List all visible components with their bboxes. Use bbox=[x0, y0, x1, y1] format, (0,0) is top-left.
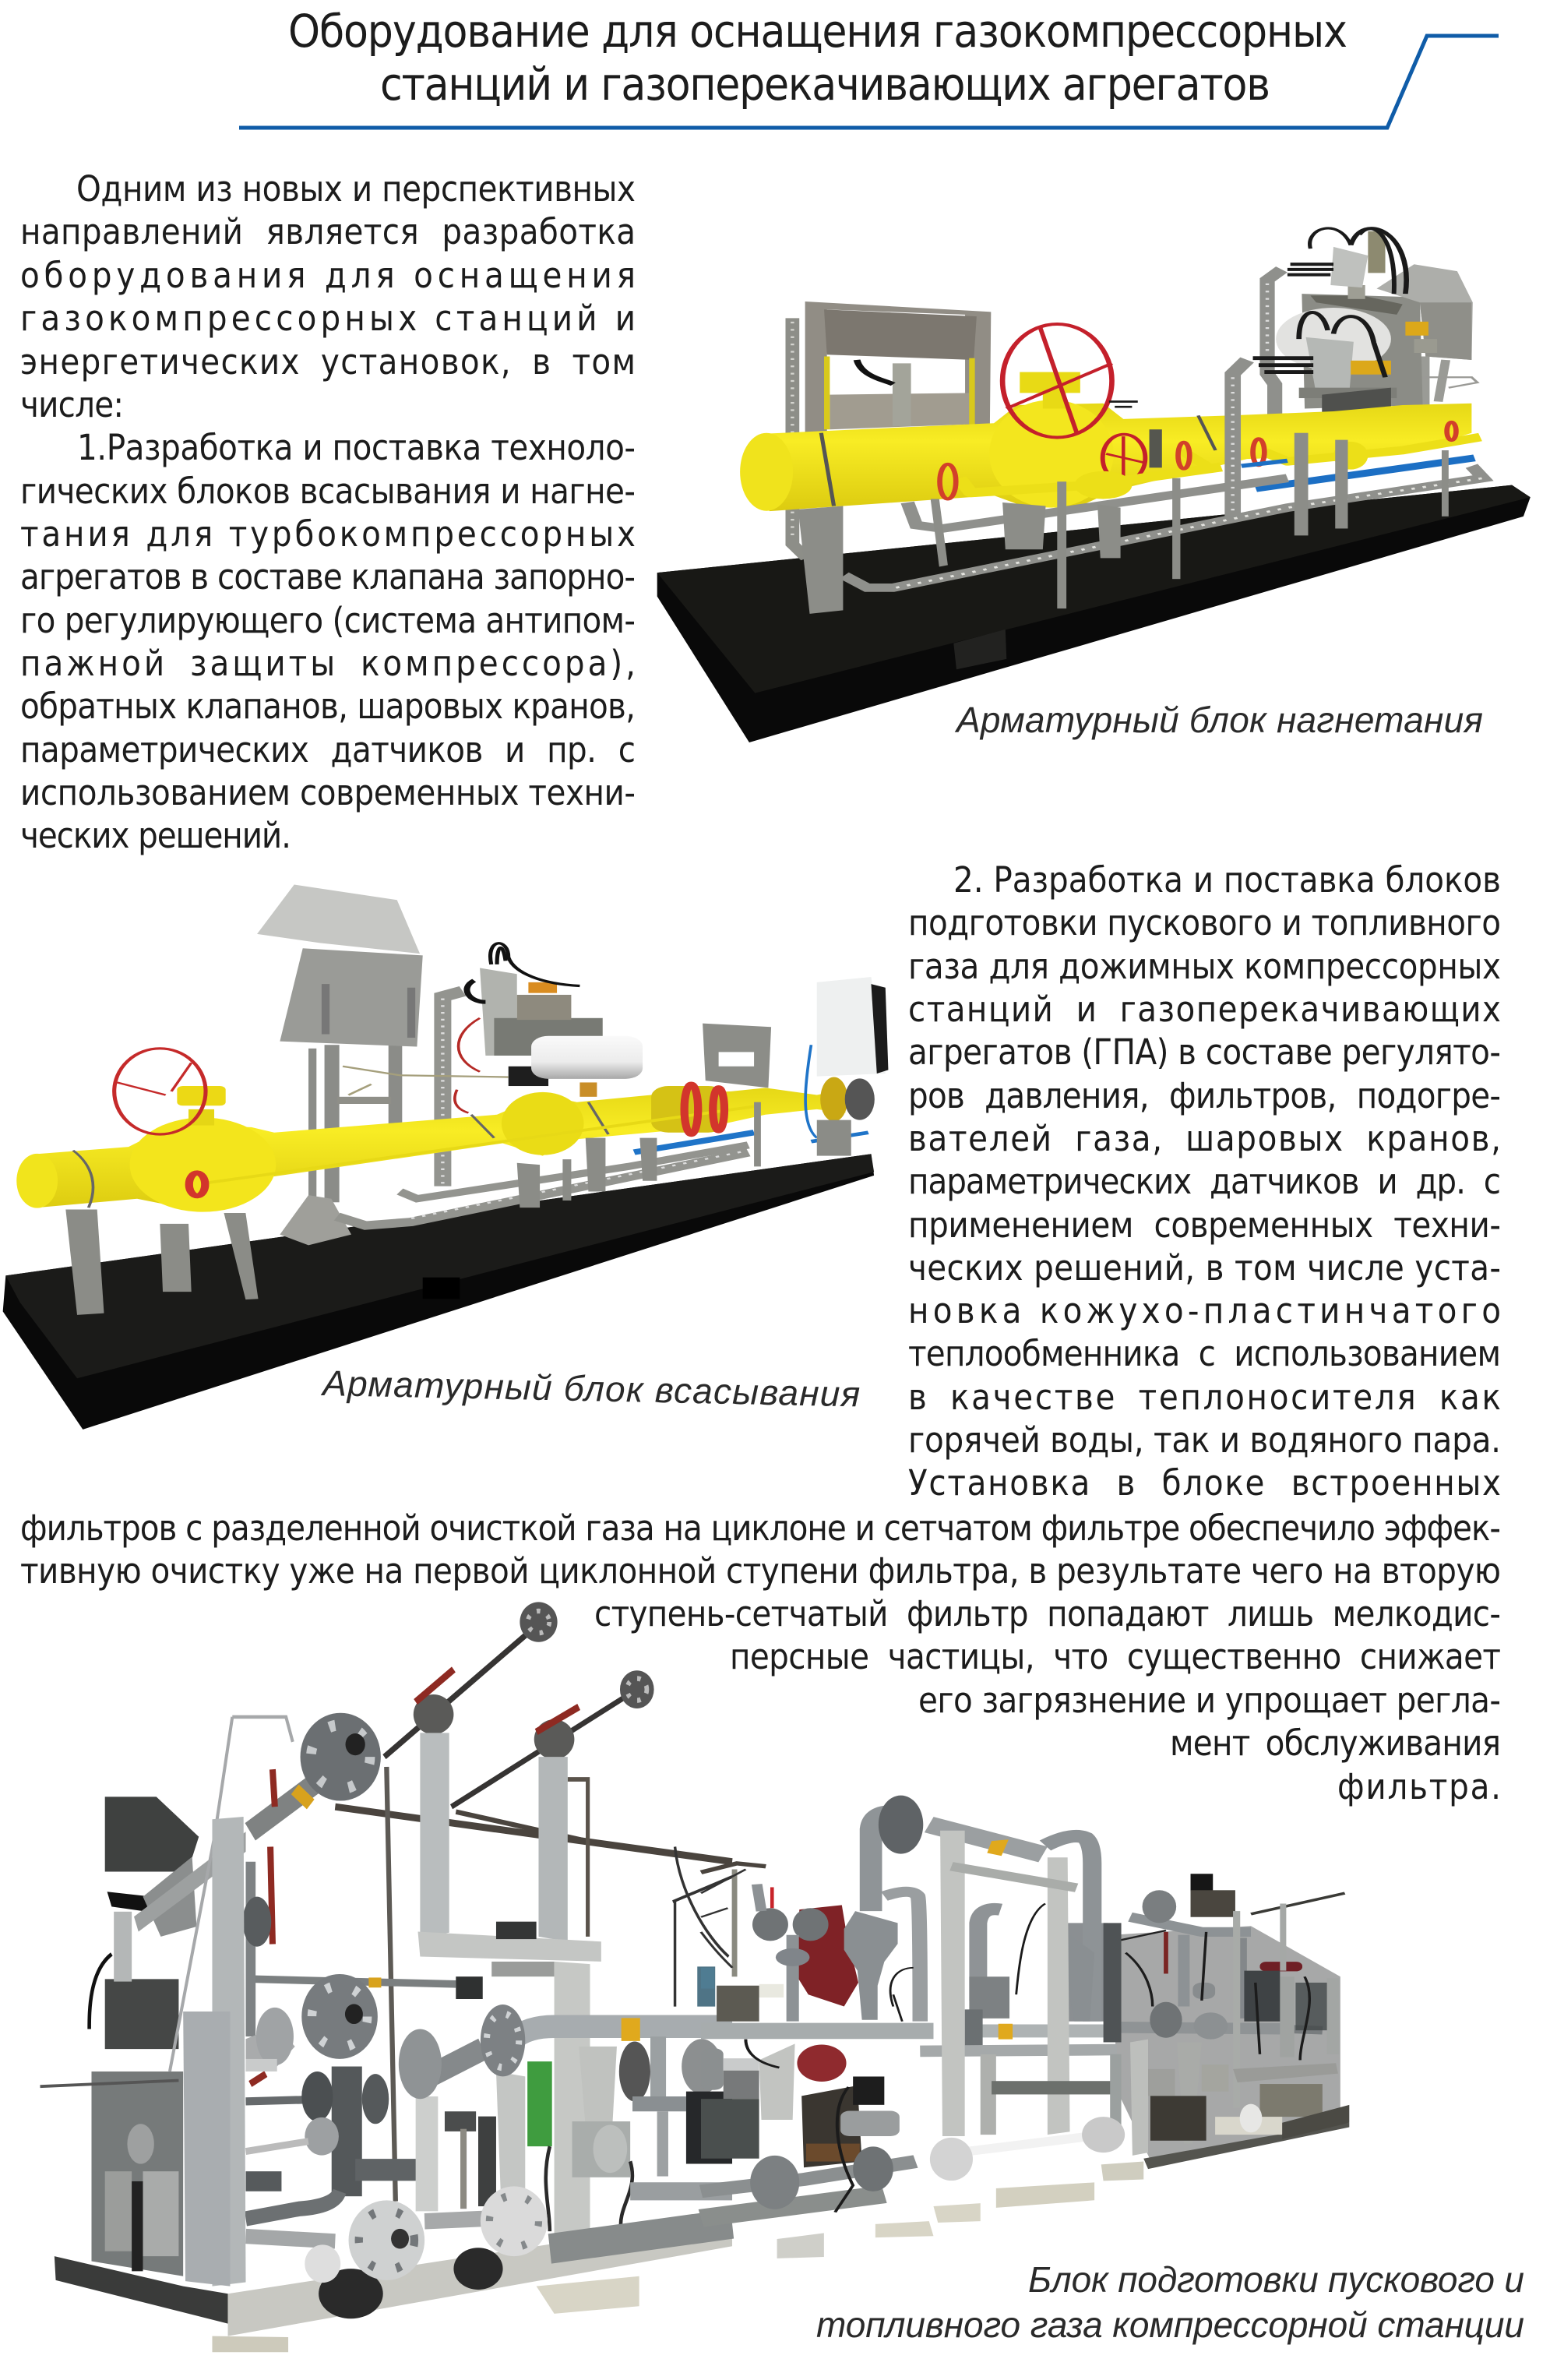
text block: item 2 bbox=[20, 859, 1501, 1807]
skid beams and timber bbox=[701, 2123, 1349, 2258]
actuator cables bbox=[467, 943, 579, 1002]
dark rods and valves bbox=[40, 1602, 732, 2202]
blue pipes bbox=[1242, 458, 1474, 488]
platform bbox=[657, 485, 1531, 742]
text block: item 2: вателей газа, шаровых кранов, bbox=[908, 1118, 1501, 1159]
far section of the unit bbox=[1104, 1874, 1349, 2156]
text block: item 2: ческих решений, в том числе уста- bbox=[908, 1247, 1501, 1289]
text block: introduction and item 1: го регулирующего (система антипом- bbox=[20, 600, 636, 641]
platform bbox=[3, 1154, 874, 1430]
caption: gas preparation block: топливного газа компрессорной станции bbox=[816, 2304, 1524, 2345]
text block: introduction and item 1: обратных клапанов, шаровых кранов, bbox=[20, 686, 636, 727]
text block: introduction and item 1: направлений является разработка bbox=[20, 211, 636, 252]
lower pipe runs bbox=[701, 1904, 1125, 2213]
hand wheels bbox=[1002, 324, 1145, 481]
rear tall stands bbox=[280, 1045, 402, 1245]
text block: item 2: станций и газоперекачивающих bbox=[908, 989, 1501, 1030]
text block: item 2: новка кожухо-пластинчатого bbox=[908, 1290, 1501, 1331]
small yellow line bbox=[209, 1105, 759, 1183]
supports bbox=[65, 1102, 851, 1315]
text block: item 2: применением современных техни- bbox=[908, 1204, 1501, 1246]
supports bbox=[798, 429, 1449, 614]
text block: introduction and item 1: агрегатов в составе клапана запорно- bbox=[20, 556, 636, 598]
red flanges bbox=[940, 422, 1456, 499]
red handles bbox=[250, 1670, 579, 2084]
skid base bbox=[55, 2216, 732, 2352]
text block: introduction and item 1: пажной защиты компрессора), bbox=[20, 643, 636, 684]
far section backdrop bbox=[1112, 1926, 1340, 2164]
text block: introduction and item 1 bbox=[20, 168, 636, 856]
cable tray risers bbox=[400, 991, 749, 1199]
light frame columns bbox=[183, 1733, 601, 2287]
text block: item 2: теплообменника с использованием bbox=[908, 1333, 1501, 1374]
text block: item 2: Установка в блоке встроенных bbox=[908, 1462, 1501, 1504]
rear frame bbox=[792, 301, 991, 558]
silver impulse line bbox=[343, 1067, 509, 1095]
left part of the unit bbox=[40, 1602, 732, 2352]
photo: discharge valve block bbox=[657, 228, 1531, 742]
actuators and instrument boxes bbox=[1276, 231, 1473, 440]
text block: item 2: персные частицы, что существенно снижает bbox=[730, 1636, 1501, 1677]
text block: introduction and item 1: газокомпрессорных станций и bbox=[20, 298, 636, 339]
light frame posts bbox=[759, 1831, 1122, 2136]
title underline bracket bbox=[239, 36, 1499, 128]
weather shelter bbox=[257, 885, 423, 1047]
text block: introduction and item 1: гических блоков всасывания и нагне- bbox=[20, 471, 636, 512]
text block: item 2: газа для дожимных компрессорных bbox=[908, 946, 1501, 987]
rear elbows bbox=[701, 1863, 1108, 2022]
rear tower tray bbox=[1267, 270, 1478, 433]
lower cable tray bbox=[337, 1151, 749, 1225]
left cabinet and actuators bbox=[91, 1796, 199, 2276]
text block: item 2: фильтров с разделенной очисткой газа на циклоне и сетчатом фильтре обеспечило эффек- bbox=[20, 1507, 1501, 1549]
text block: introduction and item 1: энергетических установок, в том bbox=[20, 341, 636, 383]
caption: discharge block: Арматурный блок нагнетания bbox=[954, 700, 1483, 740]
text block: introduction and item 1: параметрических датчиков и пр. с bbox=[20, 729, 636, 770]
text block: introduction and item 1: оборудования для оснащения bbox=[20, 255, 636, 296]
hand wheel bbox=[114, 1049, 206, 1134]
text block: introduction and item 1: числе: bbox=[20, 384, 124, 425]
mid pipework rear bbox=[243, 1862, 456, 2241]
main riser with cone bbox=[844, 1796, 1094, 2022]
blue pipes bbox=[634, 1045, 868, 1152]
diagonal beam and top flange pipe bbox=[134, 1713, 381, 2071]
title: станций и газоперекачивающих агрегатов bbox=[380, 58, 1270, 111]
right part of the unit bbox=[701, 1796, 1349, 2258]
main grey pipe and flanges bbox=[399, 1922, 732, 2231]
caption: gas preparation block: Блок подготовки пускового и bbox=[1028, 2259, 1524, 2300]
photo: start and fuel gas preparation block bbox=[40, 1602, 1349, 2352]
text block: introduction and item 1: ческих решений. bbox=[20, 815, 291, 856]
text block: item 2: его загрязнение и упрощает регла- bbox=[918, 1680, 1501, 1721]
text block: item 2: ров давления, фильтров, подогре- bbox=[908, 1075, 1501, 1116]
caption: gas preparation block bbox=[816, 2259, 1524, 2345]
caption: suction block: Арматурный блок всасывания bbox=[320, 1363, 861, 1414]
tower backdrop bbox=[1302, 294, 1423, 408]
right frame bbox=[703, 977, 888, 1088]
red valve bbox=[752, 1885, 858, 2082]
cable trays bbox=[844, 360, 1483, 587]
text block: item 2: в качестве теплоносителя как bbox=[908, 1377, 1501, 1418]
control cables bbox=[1109, 228, 1407, 407]
title: Оборудование для оснащения газокомпрессорных bbox=[288, 5, 1347, 58]
lower pale flanges bbox=[305, 2186, 732, 2283]
text block: item 2: подготовки пускового и топливного bbox=[908, 902, 1501, 943]
text block: item 2: мент обслуживания bbox=[1170, 1722, 1501, 1764]
text block: introduction and item 1: 1.Разработка и поставка техноло- bbox=[77, 427, 636, 468]
actuator bbox=[480, 968, 643, 1097]
title bbox=[288, 5, 1347, 111]
photo: suction valve block bbox=[3, 885, 888, 1430]
text block: introduction and item 1: Одним из новых и перспективных bbox=[76, 168, 636, 210]
text block: introduction and item 1: использованием современных техни- bbox=[20, 772, 636, 813]
main yellow pipeline bbox=[16, 1077, 875, 1212]
text block: item 2: параметрических датчиков и др. с bbox=[908, 1161, 1501, 1202]
text block: item 2: ступень-сетчатый фильтр попадают лишь мелкодис- bbox=[594, 1593, 1501, 1634]
text block: item 2: горячей воды, так и водяного пара. bbox=[908, 1419, 1501, 1461]
small yellow pipes bbox=[960, 437, 1480, 499]
text block: item 2: агрегатов (ГПА) в составе регулято- bbox=[908, 1031, 1501, 1073]
text block: item 2: 2. Разработка и поставка блоков bbox=[953, 859, 1501, 901]
text block: item 2: тивную очистку уже на первой циклонной ступени фильтра, в результате чего на вторую bbox=[20, 1550, 1501, 1592]
text block: item 2: фильтра. bbox=[1337, 1766, 1501, 1807]
main horizontal gas pipe bbox=[701, 2009, 1117, 2099]
red tubing bbox=[455, 1018, 480, 1112]
text block: introduction and item 1: тания для турбокомпрессорных bbox=[20, 513, 636, 555]
instrument and drive units bbox=[701, 1968, 900, 2167]
main yellow pipe bbox=[740, 372, 1471, 511]
red flanges bbox=[189, 1084, 724, 1196]
